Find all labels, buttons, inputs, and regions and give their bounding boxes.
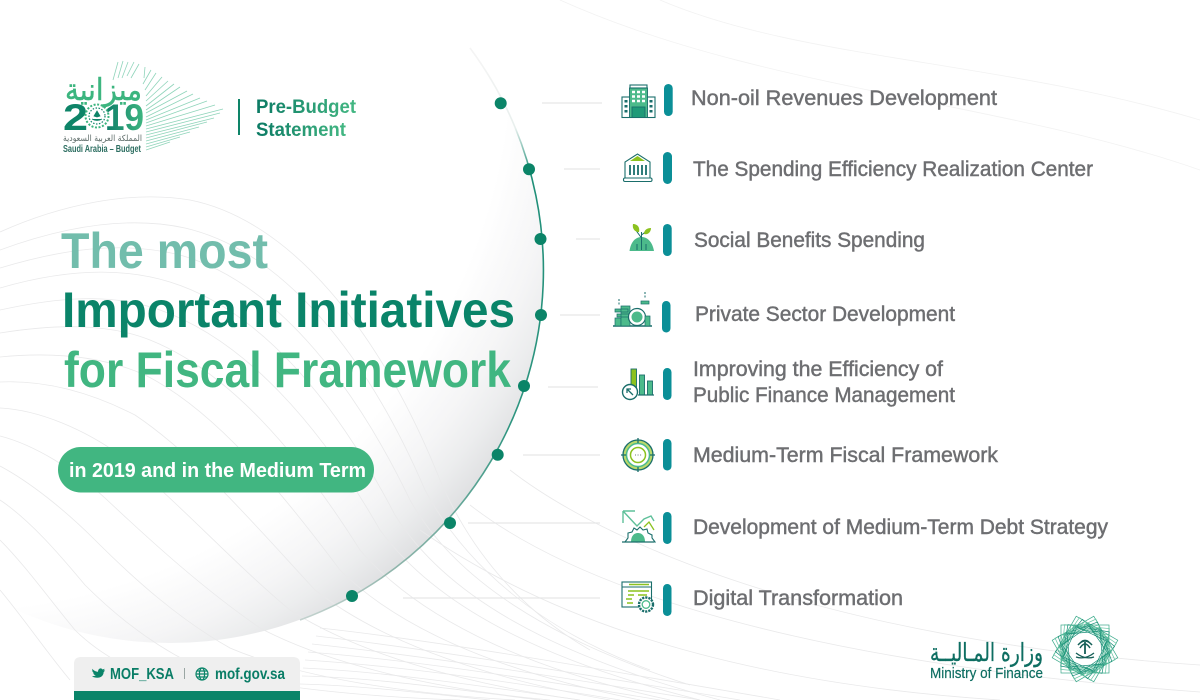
row 2: spending efficiency: The Spending Efficiency Realization Center	[693, 157, 1093, 181]
icon: plant on hill	[630, 224, 654, 251]
heading: pre-budget statement: Statement	[256, 119, 346, 141]
arabic wordmark: ميزانية	[65, 73, 142, 108]
row 7: debt strategy	[444, 511, 1108, 544]
row 5: public finance management	[518, 357, 955, 407]
arabic country line: المملكة العربية السعودية	[63, 134, 142, 144]
icon: target	[621, 438, 655, 472]
rosette	[1052, 616, 1118, 682]
palm and swords emblem	[1076, 640, 1094, 658]
large gradient disc	[0, 0, 543, 643]
row 4: private sector	[535, 292, 955, 332]
row 7: debt strategy: Development of Medium-Term Debt Strategy	[693, 515, 1108, 539]
icon: globe	[196, 668, 208, 680]
year digits 19: 19	[105, 97, 144, 138]
row 1: non-oil revenues: Non-oil Revenues Development	[691, 86, 997, 110]
icon: building	[622, 85, 655, 118]
disc edge arc	[300, 48, 543, 620]
year digit 2: 2	[63, 97, 88, 138]
row 1: non-oil revenues	[495, 84, 997, 118]
title	[61, 223, 515, 398]
twitter handle: MOF_KSA	[110, 666, 174, 683]
arabic ministry name: وزارة المـاليــة	[930, 638, 1043, 668]
row 3: social benefits: Social Benefits Spending	[694, 228, 925, 252]
row 8: digital transformation	[346, 582, 903, 616]
footer green bar	[74, 691, 300, 700]
icon: bars and clock	[622, 369, 654, 400]
row 3: social benefits	[534, 224, 925, 256]
english country line: Saudi Arabia – Budget	[63, 144, 141, 155]
website: mof.gov.sa	[215, 666, 285, 683]
icon: coins stack	[613, 292, 652, 326]
header divider	[238, 99, 240, 135]
logo: budget 2019	[63, 61, 223, 155]
two-line label	[693, 357, 955, 407]
subtitle pill: in 2019 and in the Medium Term	[69, 460, 366, 482]
icon: window and gear	[622, 582, 653, 612]
subtitle pill	[58, 447, 374, 492]
icon: bank on laptop	[624, 154, 652, 182]
two-line label: Public Finance Management	[693, 383, 955, 407]
footer contact panel	[74, 657, 300, 700]
row 2: spending efficiency	[523, 152, 1093, 184]
icon: gear and arrows	[622, 511, 655, 542]
title line 3: for Fiscal Framework	[64, 342, 511, 398]
ministry of finance logo	[930, 616, 1118, 682]
heading: pre-budget statement	[256, 96, 356, 141]
icon: twitter bird	[92, 668, 105, 678]
two-line label: Improving the Efficiency of	[693, 357, 943, 381]
english ministry name: Ministry of Finance	[930, 665, 1043, 682]
row 8: digital transformation: Digital Transformation	[693, 586, 903, 610]
year emblem	[86, 104, 108, 128]
heading: pre-budget statement: Pre-Budget	[256, 96, 356, 118]
row 4: private sector: Private Sector Development	[695, 302, 955, 326]
row 6: medium-term fiscal framework: Medium-Term Fiscal Framework	[693, 443, 998, 467]
saudi map line fan	[113, 61, 223, 150]
title line 2: Important Initiatives	[62, 282, 515, 338]
row 6: medium-term fiscal framework	[492, 438, 998, 472]
title line 1: The most	[61, 223, 268, 279]
